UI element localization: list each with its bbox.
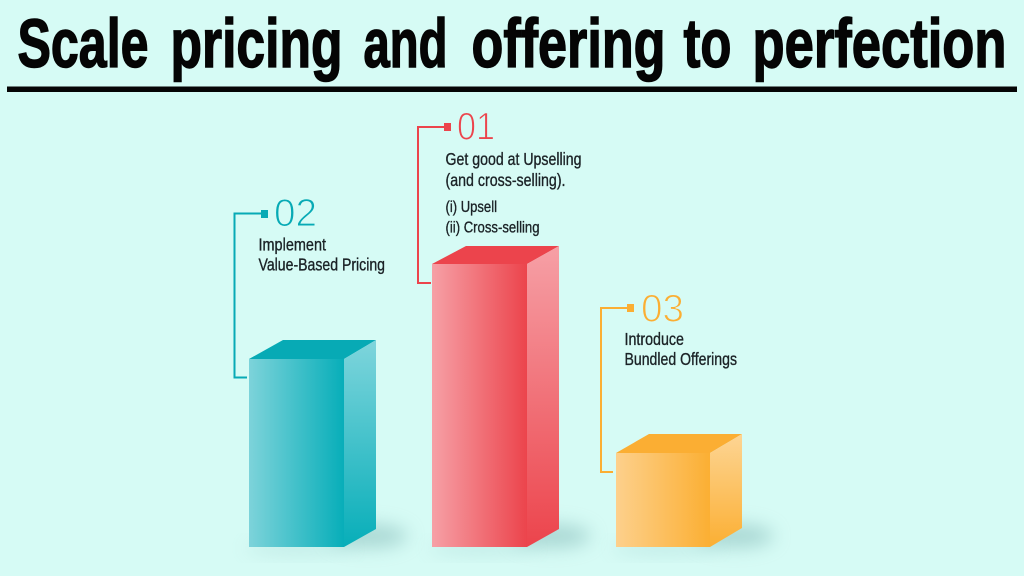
title: Scale: [18, 5, 148, 82]
connector 02: [234, 210, 268, 378]
title: offering: [472, 5, 666, 82]
text block 01: Get good at Upselling: [446, 149, 582, 169]
number 02: 02: [274, 192, 317, 235]
bar 03: orange: [616, 434, 742, 547]
shadows under bars: [245, 524, 774, 553]
text block 01: [446, 149, 582, 236]
text block 01: (and cross-selling).: [446, 170, 566, 190]
bar 01: red: [432, 246, 559, 547]
number 03: 03: [641, 288, 684, 330]
title: and: [364, 5, 448, 82]
connector 03: [601, 304, 634, 472]
text block 03: [624, 329, 737, 369]
text block 03: Introduce: [624, 329, 684, 349]
text block 01: (ii) Cross-selling: [446, 220, 540, 236]
connector 01: [418, 123, 451, 283]
text block 03: Bundled Offerings: [624, 349, 737, 369]
title underline: [7, 86, 1017, 92]
text block 02: Value-Based Pricing: [258, 254, 385, 274]
title: pricing: [170, 5, 342, 82]
number 01: 01: [457, 106, 495, 148]
title: to: [684, 5, 732, 82]
text block 02: Implement: [258, 234, 326, 254]
bar 02: teal: [249, 340, 376, 547]
text block 01: (i) Upsell: [446, 199, 497, 216]
text block 02: [258, 234, 385, 274]
